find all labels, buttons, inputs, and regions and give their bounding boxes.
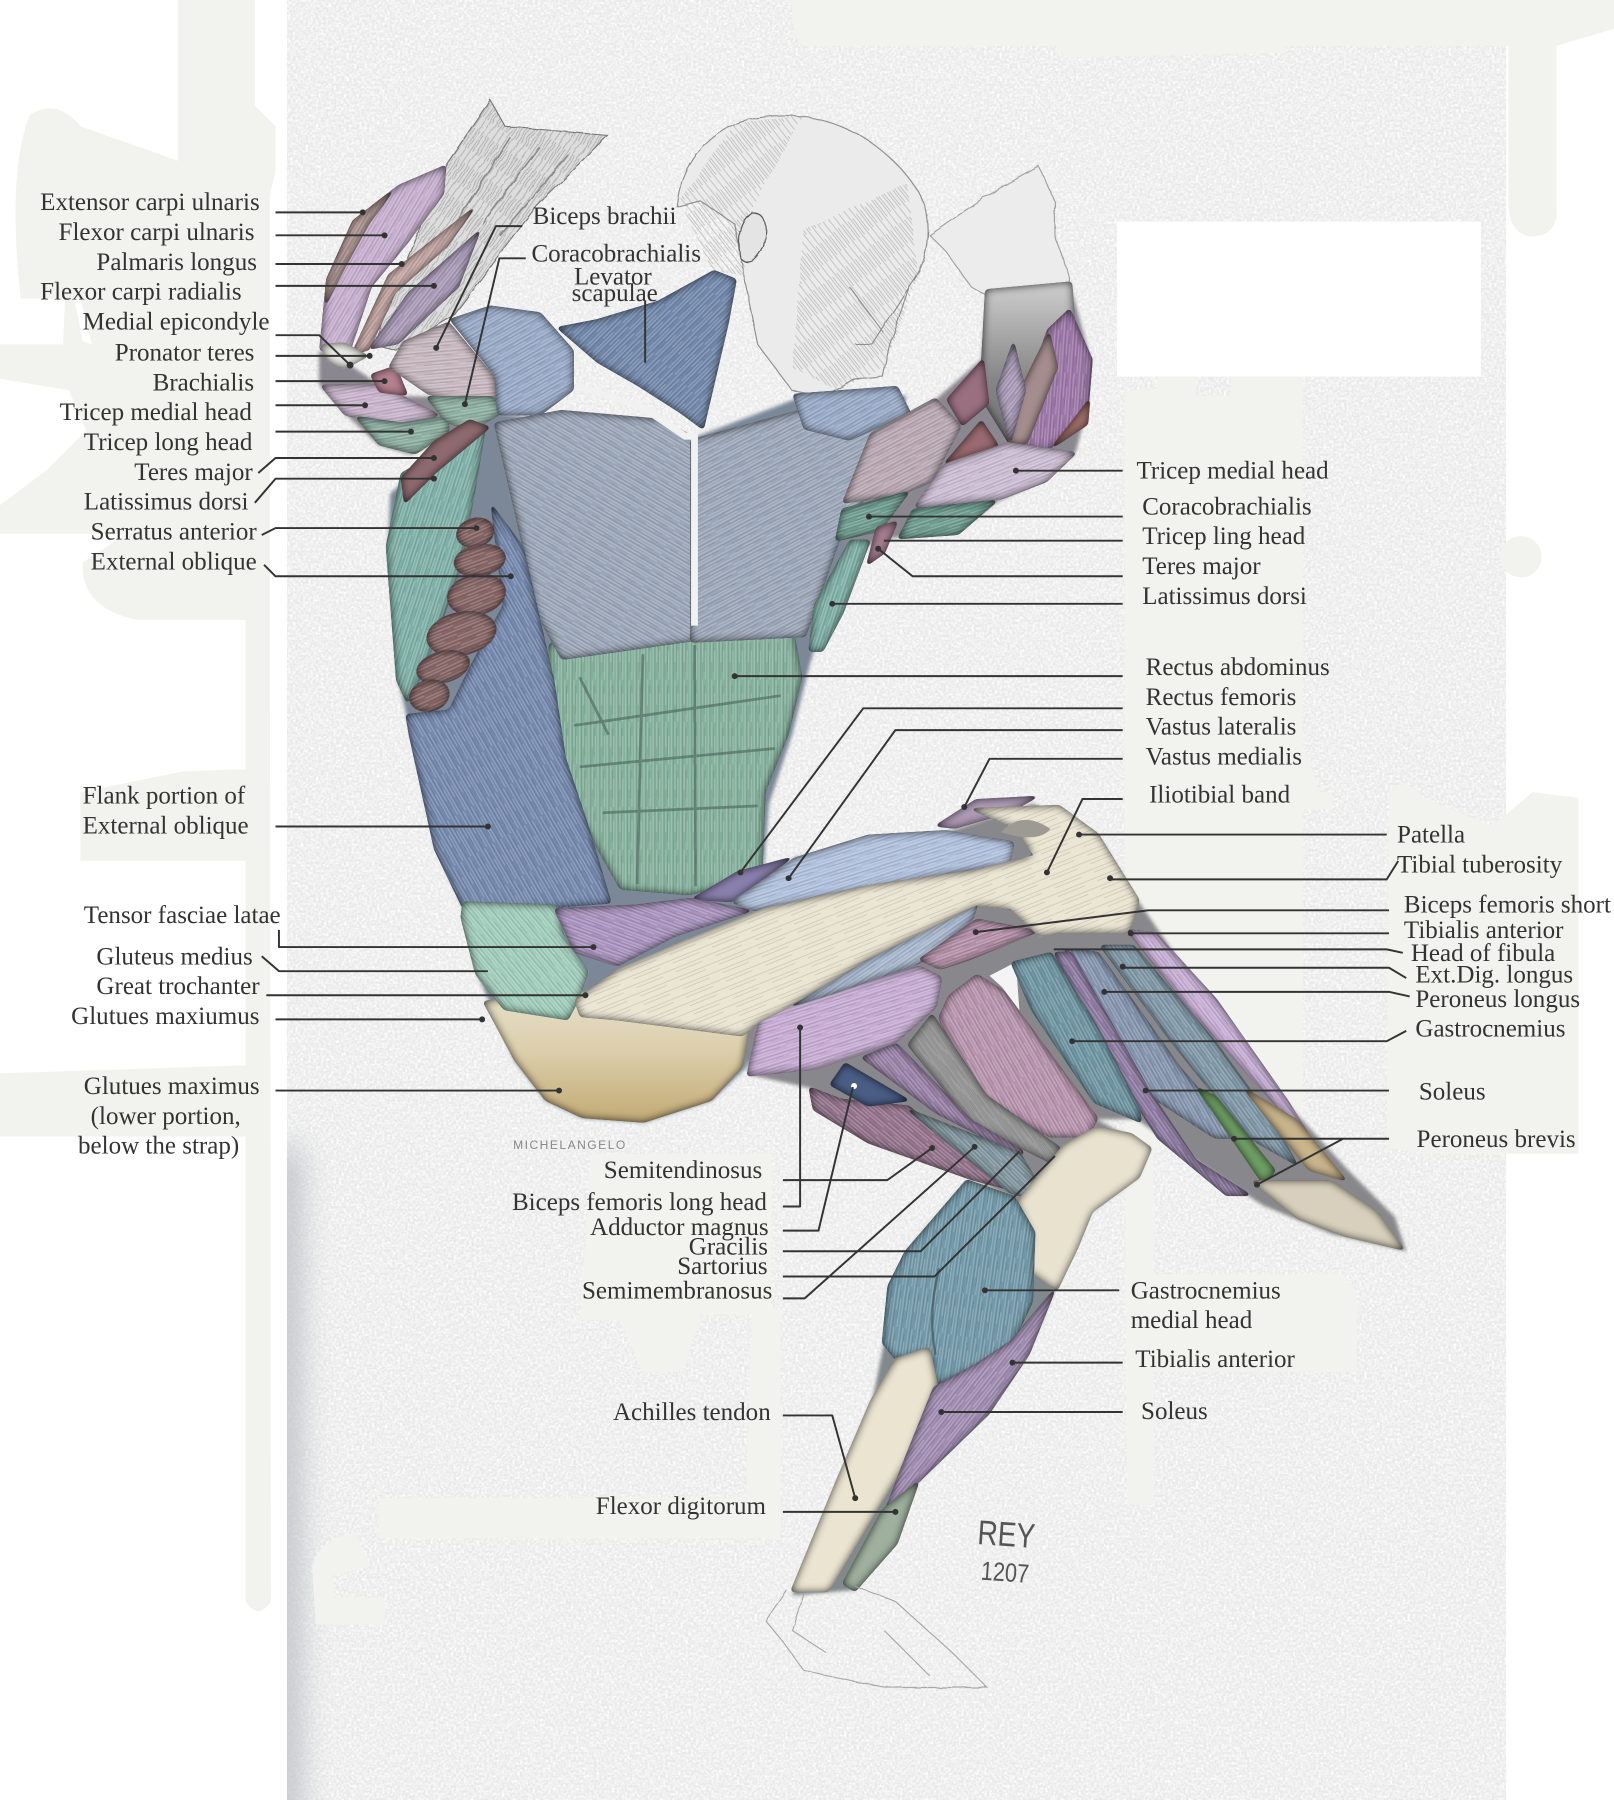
vastus lateralis — [730, 830, 1015, 911]
iliotibial band and knee — [574, 805, 1140, 1037]
label: Vastus medialis — [961, 744, 1302, 810]
label: Great trochanter: Great trochanter — [96, 973, 260, 1000]
blank white box — [1117, 222, 1481, 377]
teres major — [401, 419, 491, 505]
label: Glutues maximus lower portion: (lower portion, — [91, 1103, 241, 1130]
label: Gluteus medius: Gluteus medius — [96, 943, 253, 970]
label: Pronator teres: Pronator teres — [115, 339, 254, 366]
label: Gastrocnemius medial head — [982, 1277, 1281, 1334]
left labels — [40, 189, 596, 1160]
label: Glutues maxiumus — [71, 1003, 485, 1030]
label: Gracilis: Gracilis — [689, 1234, 768, 1261]
label: Vastus medialis: Vastus medialis — [1146, 744, 1302, 771]
label: Levator scapulae: Levator — [574, 264, 652, 291]
pencil inscription: Michelangelo: MICHELANGELO — [513, 1138, 627, 1152]
upper arm muscles — [319, 321, 503, 455]
label: Medial epicondyle — [83, 308, 354, 368]
label: Semitendinosus — [604, 1145, 935, 1184]
label: Flexor carpi ulnaris — [59, 219, 388, 246]
white gap behind knee — [990, 962, 1019, 1010]
label: Tricep ling head: Tricep ling head — [1142, 523, 1306, 550]
raised left-hand sketch — [930, 166, 1070, 298]
label: Tibialis anterior lower: Tibialis anterior — [1135, 1346, 1296, 1373]
raised right hand and wrist tendons — [373, 100, 607, 350]
adductor highlight dot — [851, 1083, 857, 1089]
label: Soleus — [1143, 1079, 1486, 1106]
gluteus medius — [460, 901, 589, 1021]
label: Flank portion of External oblique — [83, 783, 491, 839]
lower centre labels — [512, 1024, 1055, 1520]
muscle figure — [319, 100, 1406, 1688]
label: Extensor carpi ulnaris: Extensor carpi ulnaris — [40, 189, 260, 216]
label: Levator scapulae — [572, 264, 658, 363]
serratus anterior — [405, 513, 510, 717]
neck and deltoid — [449, 270, 737, 430]
label: Serratus anterior — [91, 519, 479, 546]
label: Tricep medial head — [60, 399, 368, 426]
label: Sartorius: Sartorius — [677, 1253, 768, 1280]
label: Glutues maximus lower portion — [78, 1073, 562, 1160]
label: Tricep medial head: Tricep medial head — [60, 399, 252, 426]
artist signature: 1207 — [980, 1556, 1030, 1589]
artist signature — [976, 1514, 1036, 1589]
label: Achilles tendon — [613, 1399, 858, 1501]
rectus abdominus — [546, 620, 802, 895]
paper sheet — [270, 0, 1506, 1800]
biceps femoris short head — [917, 918, 1041, 970]
label: Tibialis anterior — [1128, 917, 1564, 944]
label: Patella: Patella — [1397, 822, 1465, 849]
label: Biceps femoris short — [973, 892, 1611, 935]
label: Biceps brachii: Biceps brachii — [533, 203, 676, 230]
label: Coracobrachialis: Coracobrachialis — [531, 241, 701, 268]
label: Semimembranosus: Semimembranosus — [582, 1277, 772, 1304]
label: Flexor carpi radialis — [40, 279, 437, 306]
hamstring group — [808, 973, 1099, 1204]
label: Tibial tuberosity — [1107, 851, 1563, 881]
label: Teres major: Teres major — [134, 459, 253, 486]
label: Vastus lateralis: Vastus lateralis — [1146, 714, 1296, 741]
external oblique and flank — [405, 502, 612, 909]
label: Gluteus medius — [96, 943, 488, 971]
label: Gastrocnemius: Gastrocnemius — [1415, 1016, 1565, 1043]
label: Flank portion of External oblique: External oblique — [83, 812, 249, 839]
extended lower-leg muscles — [1010, 929, 1406, 1251]
label: Flexor digitorum — [596, 1493, 898, 1520]
label: Iliotibial band: Iliotibial band — [1149, 781, 1291, 808]
back torso — [494, 386, 911, 660]
label: Latissimus dorsi — [829, 583, 1307, 610]
upper centre labels — [433, 203, 701, 407]
gluteus maximus — [482, 990, 753, 1123]
label: Teres major: Teres major — [1142, 553, 1261, 580]
label: Gastrocnemius — [1069, 1016, 1565, 1044]
label: Tricep long head — [84, 429, 414, 456]
under-drawing — [319, 284, 1406, 1596]
label: Coracobrachialis — [462, 241, 701, 407]
label: Vastus lateralis — [786, 714, 1296, 881]
label: Flexor digitorum: Flexor digitorum — [596, 1493, 767, 1520]
label: Palmaris longus: Palmaris longus — [96, 249, 257, 276]
label: Palmaris longus — [96, 249, 405, 276]
label: Soleus: Soleus — [1419, 1079, 1486, 1106]
lower leg — [790, 1126, 1153, 1592]
label: Gastrocnemius medial head: Gastrocnemius — [1131, 1277, 1281, 1304]
label: Semimembranosus — [582, 1144, 978, 1304]
label: Biceps femoris long head: Biceps femoris long head — [512, 1189, 767, 1216]
label: Gastrocnemius medial head: medial head — [1131, 1307, 1253, 1334]
label: Biceps femoris long head — [512, 1024, 803, 1216]
label: Latissimus dorsi — [84, 476, 437, 516]
label: Teres major — [875, 546, 1261, 580]
label: Tensor fasciae latae: Tensor fasciae latae — [84, 902, 281, 929]
label: Ext.Dig. longus — [1120, 962, 1573, 989]
left arm — [808, 281, 1093, 652]
label: Rectus femoris: Rectus femoris — [1146, 684, 1296, 711]
label: Sartorius — [677, 1156, 1055, 1280]
label: Rectus abdominus: Rectus abdominus — [1146, 654, 1330, 681]
forearm muscles — [319, 164, 482, 370]
label: Tibialis anterior: Tibialis anterior — [1404, 917, 1564, 944]
label: Adductor magnus — [590, 1087, 853, 1241]
label: Brachialis — [153, 369, 388, 396]
label: Teres major — [134, 455, 437, 486]
label: Glutues maxiumus: Glutues maxiumus — [71, 1003, 259, 1030]
label: Tibial tuberosity: Tibial tuberosity — [1397, 851, 1563, 878]
label: Tibialis anterior lower — [1009, 1346, 1296, 1373]
label: Gracilis — [689, 1151, 1019, 1261]
label: Biceps brachii — [433, 203, 676, 351]
label: Peroneus longus — [1101, 986, 1580, 1013]
label: Coracobrachialis — [866, 493, 1312, 520]
label: Head of fibula: Head of fibula — [1411, 940, 1555, 967]
label: Flank portion of External oblique: Flank portion of — [83, 783, 246, 810]
label: Extensor carpi ulnaris — [40, 189, 366, 216]
label: Semitendinosus: Semitendinosus — [604, 1157, 762, 1184]
label: Latissimus dorsi: Latissimus dorsi — [84, 489, 249, 516]
label: Latissimus dorsi: Latissimus dorsi — [1142, 583, 1307, 610]
label: Soleus lower — [938, 1398, 1208, 1425]
label: Glutues maximus lower portion: Glutues maximus — [84, 1073, 260, 1100]
right labels — [732, 458, 1611, 1425]
label: Patella — [1076, 822, 1465, 849]
label: Rectus abdominus — [732, 654, 1330, 681]
vastus medialis — [933, 796, 1041, 829]
label: Rectus femoris — [737, 684, 1296, 875]
label: External oblique: External oblique — [91, 548, 257, 575]
label: Pronator teres — [115, 339, 373, 366]
label: Peroneus longus: Peroneus longus — [1415, 986, 1580, 1013]
label: Soleus lower: Soleus — [1141, 1398, 1208, 1425]
foot sketch — [766, 1586, 987, 1688]
label: Head of fibula — [1054, 940, 1555, 967]
label: Peroneus brevis: Peroneus brevis — [1417, 1126, 1576, 1153]
label: Peroneus brevis — [1231, 1126, 1576, 1188]
label: Serratus anterior: Serratus anterior — [91, 519, 257, 546]
label: Ext.Dig. longus: Ext.Dig. longus — [1415, 962, 1573, 989]
rectus femoris and tensor — [553, 855, 797, 967]
head sketch — [677, 115, 928, 396]
label: Medial epicondyle: Medial epicondyle — [83, 308, 270, 335]
label: Tricep medial head — [1013, 458, 1329, 485]
label: Glutues maximus lower portion: below the strap) — [78, 1133, 239, 1160]
artist signature: REY — [976, 1514, 1036, 1556]
label: Flexor carpi radialis: Flexor carpi radialis — [40, 279, 242, 306]
vastus intermedius — [782, 901, 979, 1010]
label: Tricep medial head: Tricep medial head — [1136, 458, 1329, 485]
latissimus dorsi side — [386, 424, 487, 705]
label: Iliotibial band — [1044, 781, 1291, 875]
label: Biceps femoris short: Biceps femoris short — [1404, 892, 1611, 919]
label: Flexor carpi ulnaris: Flexor carpi ulnaris — [59, 219, 254, 246]
label: Adductor magnus: Adductor magnus — [590, 1214, 769, 1241]
label: Tricep long head: Tricep long head — [84, 429, 253, 456]
label: Levator scapulae: scapulae — [572, 280, 658, 307]
label: Achilles tendon: Achilles tendon — [613, 1399, 771, 1426]
biceps femoris long head — [746, 965, 942, 1077]
label: Tensor fasciae latae — [84, 902, 596, 950]
label: External oblique — [91, 548, 514, 579]
label: Great trochanter — [96, 973, 588, 1000]
label: Brachialis: Brachialis — [153, 369, 254, 396]
label: Coracobrachialis: Coracobrachialis — [1142, 493, 1312, 520]
